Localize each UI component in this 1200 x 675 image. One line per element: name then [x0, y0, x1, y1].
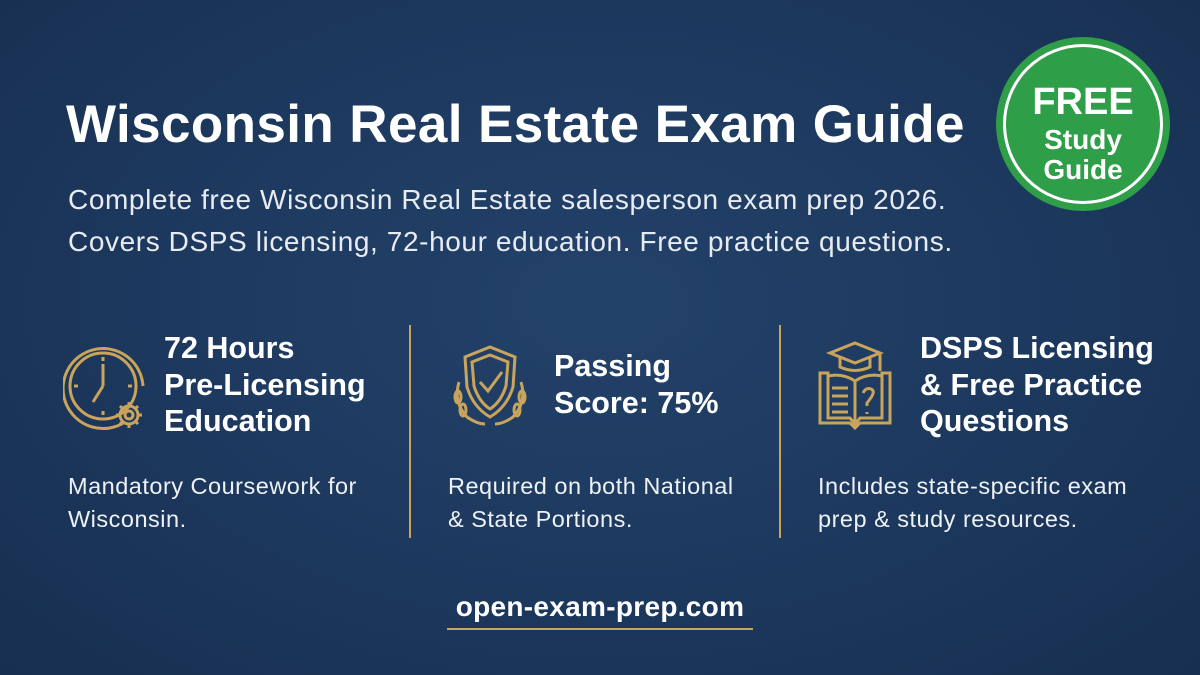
badge: free study guide: Study	[1044, 124, 1122, 155]
heading: 72 Hours	[164, 331, 295, 365]
heading: & Free Practice	[920, 368, 1142, 402]
description: Mandatory Coursework for	[68, 473, 357, 499]
description	[818, 473, 1127, 532]
panel: DSPS licensing	[818, 331, 1154, 532]
subtitle	[68, 184, 953, 257]
heading	[164, 331, 366, 438]
badge: free study guide: FREE	[1032, 81, 1134, 123]
footer url: open-exam-prep.com	[456, 591, 744, 622]
icon: clock with gear	[63, 347, 144, 430]
heading: Pre-Licensing	[164, 368, 366, 402]
description: prep & study resources.	[818, 506, 1078, 532]
badge: free study guide: Guide	[1043, 154, 1123, 185]
heading	[554, 349, 718, 420]
heading: Questions	[920, 404, 1069, 438]
title: Wisconsin Real Estate Exam Guide	[66, 95, 965, 154]
heading: DSPS Licensing	[920, 331, 1154, 365]
icon: book with grad cap	[818, 341, 892, 430]
subtitle: Covers DSPS licensing, 72-hour education. Free practice questions.	[68, 226, 953, 257]
description	[448, 473, 734, 532]
panel: passing score	[448, 345, 734, 532]
heading: Education	[164, 404, 311, 438]
divider	[409, 325, 411, 538]
description: & State Portions.	[448, 506, 633, 532]
panel: 72 hours	[63, 331, 366, 532]
description	[68, 473, 357, 532]
description: Includes state-specific exam	[818, 473, 1127, 499]
divider	[779, 325, 781, 538]
subtitle: Complete free Wisconsin Real Estate salesperson exam prep 2026.	[68, 184, 946, 215]
heading: Score: 75%	[554, 386, 718, 420]
icon: shield with laurels	[454, 345, 526, 426]
description: Required on both National	[448, 473, 734, 499]
description: Wisconsin.	[68, 506, 187, 532]
badge: free study guide	[996, 37, 1170, 211]
heading	[920, 331, 1154, 438]
heading: Passing	[554, 349, 671, 383]
